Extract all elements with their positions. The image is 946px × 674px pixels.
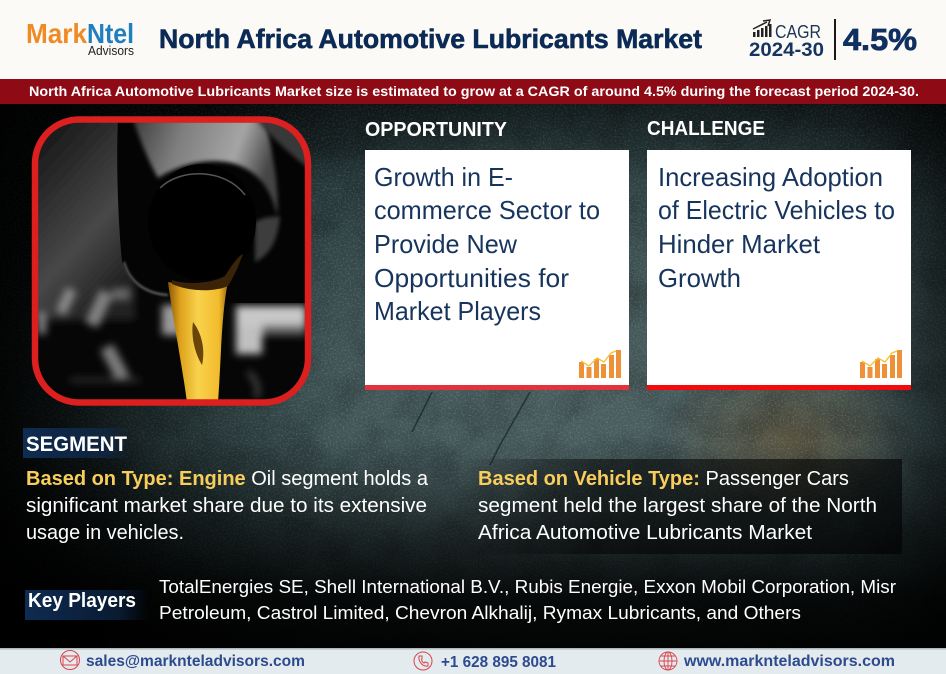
icon: globe — [659, 652, 677, 670]
icon: growth bars — [753, 20, 772, 37]
heading: segment: SEGMENT — [26, 433, 127, 456]
text: opportunity description: commerce Sector to — [374, 195, 600, 225]
icon: growth chart — [579, 350, 621, 378]
text: opportunity description — [374, 162, 600, 326]
text: segment by type — [26, 468, 429, 544]
text: challenge description — [658, 162, 895, 293]
text: segment by vehicle type: Based on Vehicle Type: Passenger Cars — [478, 468, 849, 490]
CAGR block: CAGR — [775, 22, 821, 42]
CAGR block: 2024-30 — [749, 39, 824, 61]
text: segment by type: Based on Type: Engine Oil segment holds a — [26, 468, 429, 490]
text: challenge description: of Electric Vehicles to — [658, 195, 895, 225]
logo: MarkNtel Advisors: Ntel — [87, 18, 134, 49]
panel: key players — [25, 576, 896, 623]
icon: growth chart — [860, 350, 902, 378]
text: opportunity description: Opportunities for — [374, 263, 569, 293]
heading: key players: Key Players — [28, 590, 136, 612]
heading: key players — [25, 590, 149, 620]
heading: opportunity: OPPORTUNITY — [365, 119, 508, 141]
text: key players list: Petroleum, Castrol Limited, Chevron Alkhalij, Rymax Lubricants, and Others — [159, 602, 801, 623]
card: challenge — [647, 150, 911, 390]
text: segment by type: significant market share due to its extensive — [26, 495, 427, 517]
text: challenge description: Growth — [658, 263, 741, 293]
logo: MarkNtel Advisors: Advisors — [88, 44, 134, 58]
text: opportunity description: Market Players — [374, 296, 541, 326]
heading: challenge: CHALLENGE — [647, 118, 765, 140]
text: key players list: TotalEnergies SE, Shell International B.V., Rubis Energie, Exxon Mobil Corporation, Misr — [159, 576, 896, 597]
footer band — [0, 648, 946, 674]
text: website: www.marknteladvisors.com — [683, 653, 895, 670]
header band — [0, 0, 946, 79]
text: segment by vehicle type — [462, 459, 902, 554]
panel: segment — [23, 428, 902, 554]
icon: phone — [414, 652, 432, 670]
text: key players list — [159, 576, 896, 623]
text: opportunity description: Growth in E- — [374, 162, 513, 192]
card: opportunity — [365, 150, 629, 390]
text: challenge description: Hinder Market — [658, 229, 821, 259]
logo: MarkNtel Advisors — [26, 18, 134, 58]
icon: email — [60, 650, 80, 670]
CAGR block — [749, 19, 917, 61]
text: phone: +1 628 895 8081 — [441, 654, 556, 671]
text: segment by type: usage in vehicles. — [26, 522, 184, 544]
title: North Africa Automotive Lubricants Market — [159, 24, 702, 54]
logo: MarkNtel Advisors: Mark — [26, 18, 87, 49]
text: segment by vehicle type: segment held the largest share of the North — [478, 495, 877, 517]
CAGR block: 4.5% — [843, 22, 917, 57]
photo: oil pouring from bottle — [20, 110, 308, 403]
red summary band — [0, 79, 946, 104]
panel: challenge — [647, 118, 911, 390]
red summary band: North Africa Automotive Lubricants Market size is estimated to grow at a CAGR of around 4.5% during the forecast period 2024-30. — [29, 83, 919, 99]
text: opportunity description: Provide New — [374, 229, 517, 259]
panel: opportunity — [365, 119, 629, 390]
text: email: sales@marknteladvisors.com — [86, 653, 305, 670]
text: challenge description: Increasing Adoption — [658, 162, 883, 192]
text: segment by vehicle type: Africa Automotive Lubricants Market — [478, 522, 812, 544]
